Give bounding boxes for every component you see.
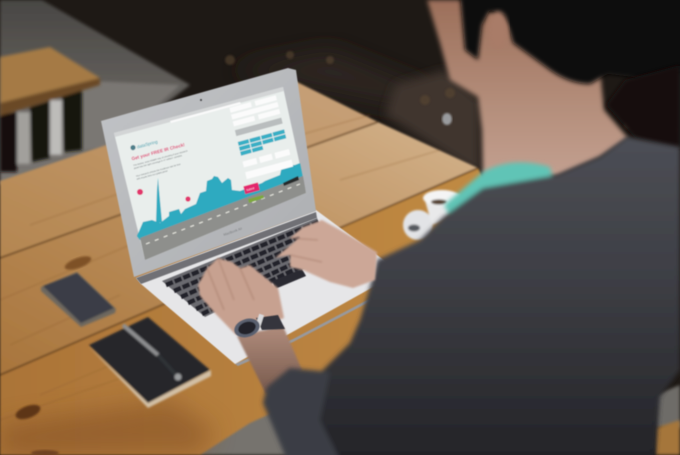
lid label: MacBook Air	[223, 226, 244, 237]
bicycle	[248, 195, 264, 203]
background foliage specks	[225, 51, 676, 134]
wristwatch	[232, 314, 285, 341]
left hand	[198, 258, 284, 335]
laptop base	[136, 210, 400, 366]
back plank	[0, 81, 378, 258]
country buttons	[238, 129, 287, 156]
reflection on ground	[442, 113, 452, 125]
option fields	[243, 149, 293, 179]
road	[140, 176, 306, 260]
form fields	[229, 95, 280, 126]
right side dark background	[606, 65, 680, 150]
logo	[130, 138, 159, 151]
map pins	[137, 189, 143, 195]
laptop screen	[114, 87, 306, 260]
heading: Get your FREE IR Check!	[131, 142, 186, 161]
hands	[198, 220, 377, 335]
icon: coffee cup on saucer	[403, 190, 461, 240]
wooden table top	[0, 81, 520, 455]
form note	[235, 118, 283, 136]
keyboard	[162, 218, 332, 317]
shirt with teal collar	[263, 137, 680, 455]
page content: Submit	[246, 186, 255, 192]
left arm	[237, 326, 302, 394]
right hand	[275, 220, 377, 288]
laptop	[101, 68, 400, 366]
logo: dataSpring	[136, 139, 159, 149]
middle plank	[0, 122, 478, 375]
intro text	[133, 149, 192, 181]
city skyline	[137, 163, 303, 240]
intro text: with results from our global panel	[136, 169, 168, 181]
person	[198, 0, 680, 455]
wooden bench in the background	[0, 47, 100, 172]
front plank	[0, 168, 520, 455]
icon: notebook with pen	[89, 317, 211, 408]
submit button	[243, 182, 260, 194]
neck and face	[427, 0, 628, 178]
car	[283, 176, 299, 186]
intro text: The fastest, most reliable way of checking if your research	[133, 149, 189, 167]
intro text: Your research checks the incidence rate for free	[136, 163, 182, 178]
hair	[460, 0, 680, 84]
intro text: panel has the right coverage in 47 million+ samples	[134, 154, 183, 170]
laptop lid	[101, 68, 317, 284]
icon: smartphone	[41, 272, 116, 327]
ear	[488, 11, 508, 49]
table shading and knots	[0, 254, 215, 455]
page content	[126, 95, 296, 221]
sleeve highlight	[263, 368, 340, 455]
